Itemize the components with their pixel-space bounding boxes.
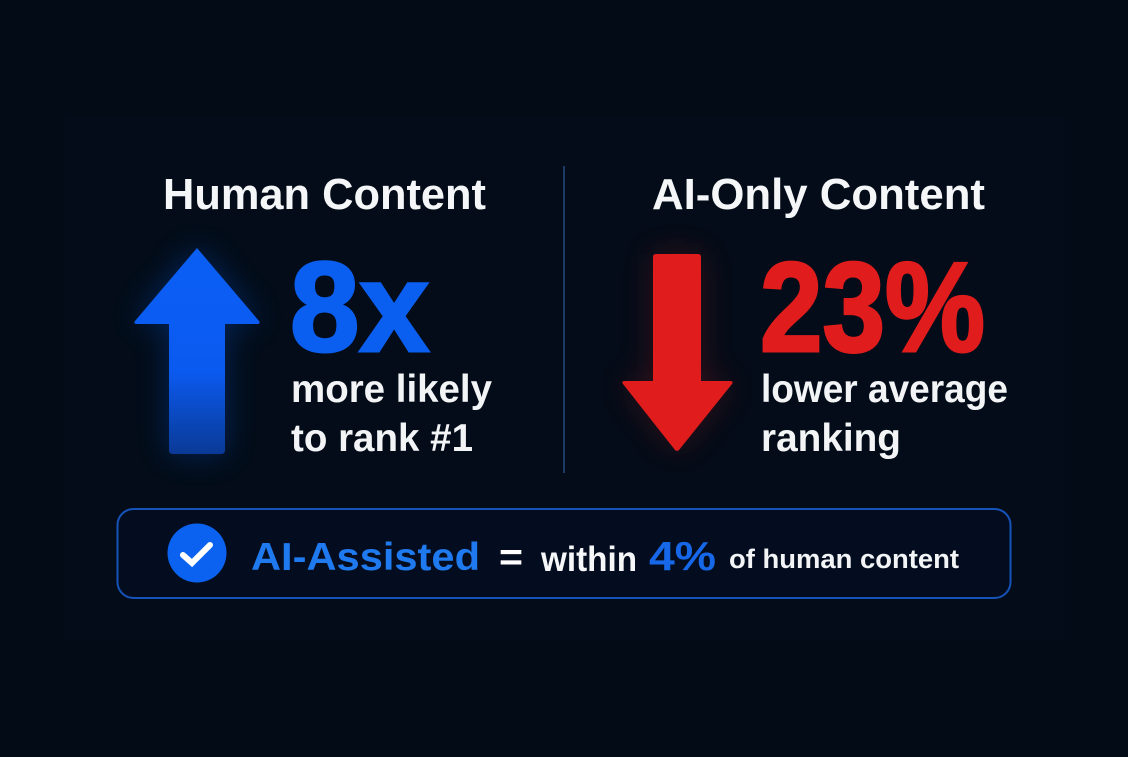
text: lower average ranking: ranking [761,417,901,460]
heading: Human Content: Human Content [163,170,486,219]
text: within: within [540,540,637,579]
text: of human content: of human content [729,544,959,574]
panel: AI-only content [622,170,1008,460]
heading: AI-Only Content: AI-Only Content [652,170,985,219]
stat: 8x: 8x [290,236,429,378]
text: more likely to rank #1: more likely [291,368,492,411]
equals sign: = [499,537,523,579]
panel: human content [134,170,492,460]
callout: AI-assisted [118,509,1010,598]
stat: 4%: 4% [649,533,716,579]
label: AI-Assisted: AI-Assisted [251,536,480,579]
icon: down arrow [622,254,733,451]
icon: check circle [168,524,226,582]
text: lower average ranking [761,368,1008,460]
stat: 23%: 23% [760,236,985,378]
text: more likely to rank #1: to rank #1 [291,417,473,460]
text: lower average ranking: lower average [761,368,1008,411]
text: more likely to rank #1 [291,368,492,460]
icon: up arrow [134,247,260,454]
